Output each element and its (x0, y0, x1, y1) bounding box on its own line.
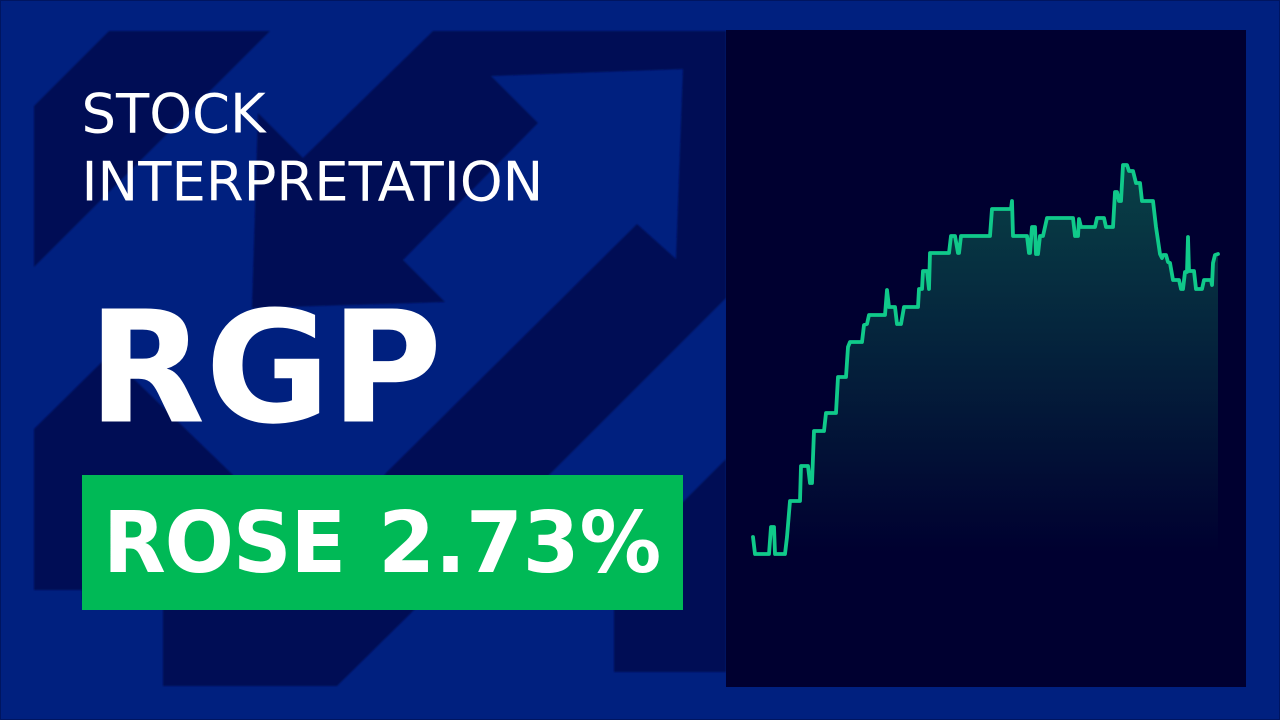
heading: stock interpretation (82, 82, 543, 214)
chart line (753, 165, 1218, 554)
change badge: ROSE 2.73% (103, 493, 661, 592)
chart panel (726, 30, 1246, 687)
ticker: RGP: RGP (88, 278, 442, 459)
background arrows (34, 31, 726, 686)
change badge (82, 475, 683, 610)
chart area fill (753, 165, 1218, 555)
heading: stock interpretation: INTERPRETATION (82, 151, 543, 214)
heading: stock interpretation: STOCK (82, 82, 267, 146)
